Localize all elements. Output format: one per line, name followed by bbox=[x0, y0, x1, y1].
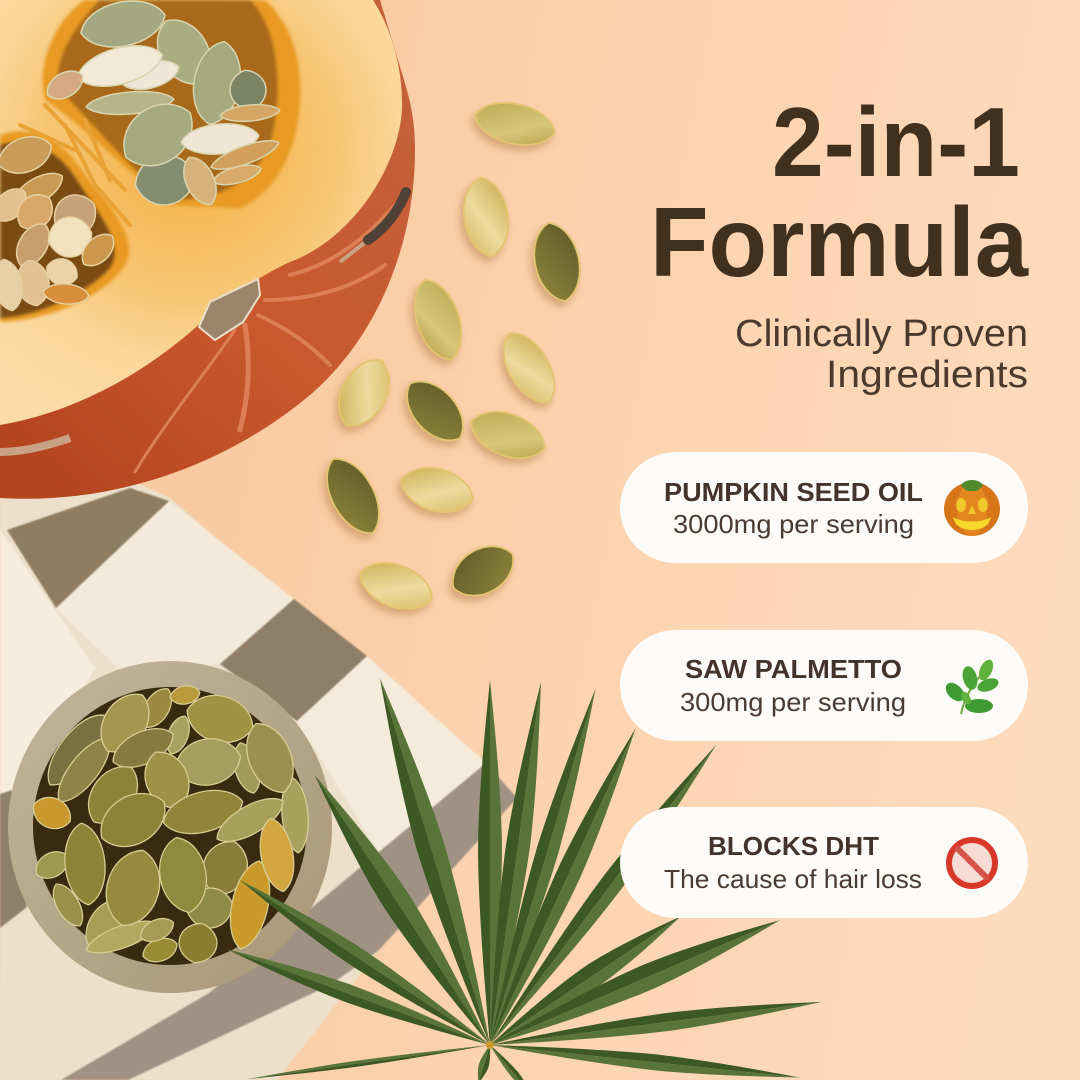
cavity seeds bbox=[42, 0, 282, 210]
subtitle: Clinically Proven bbox=[735, 313, 1028, 355]
pumpkin flesh bbox=[0, 0, 402, 425]
seed bbox=[527, 218, 587, 306]
seed bbox=[396, 460, 478, 520]
pill: saw palmetto: 300mg per serving bbox=[680, 687, 906, 717]
towel bbox=[0, 480, 517, 1080]
pill: blocks dht: The cause of hair loss bbox=[664, 864, 922, 894]
title: 2-in-1 bbox=[772, 87, 1020, 197]
icon: jack-o-lantern bbox=[944, 480, 1000, 536]
seed bbox=[471, 96, 559, 152]
pill: blocks dht bbox=[620, 807, 1028, 918]
pill: saw palmetto: SAW PALMETTO bbox=[685, 654, 902, 684]
icon: herb bbox=[942, 657, 1000, 714]
palm frond bbox=[223, 674, 823, 1080]
seed bbox=[443, 535, 523, 607]
seed bbox=[353, 553, 439, 619]
pill: pumpkin seed oil: 3000mg per serving bbox=[673, 509, 914, 539]
seed bbox=[405, 274, 471, 366]
subtitle: Ingredients bbox=[826, 354, 1028, 396]
seed bbox=[395, 369, 475, 453]
pumpkin lower cavity bbox=[0, 131, 129, 322]
seed bbox=[464, 402, 552, 468]
seed bbox=[492, 323, 566, 413]
pill: pumpkin seed oil bbox=[620, 452, 1028, 563]
bowl of seeds bbox=[8, 661, 332, 993]
loose seeds bbox=[315, 96, 587, 619]
title: Formula bbox=[650, 187, 1029, 297]
pumpkin bbox=[0, 0, 415, 499]
seed bbox=[459, 174, 513, 260]
pumpkin stem scar bbox=[199, 279, 260, 340]
pill: pumpkin seed oil: PUMPKIN SEED OIL bbox=[664, 477, 923, 507]
subtitle bbox=[735, 313, 1028, 396]
seed bbox=[315, 449, 391, 543]
pumpkin upper cavity bbox=[43, 0, 300, 208]
pumpkin skin bbox=[0, 0, 415, 499]
pumpkin fibres bbox=[20, 105, 130, 225]
icon: prohibited bbox=[949, 840, 995, 886]
seed bbox=[327, 350, 401, 436]
pill: saw palmetto bbox=[620, 630, 1028, 741]
pill: blocks dht: BLOCKS DHT bbox=[708, 831, 879, 861]
title bbox=[650, 87, 1029, 297]
